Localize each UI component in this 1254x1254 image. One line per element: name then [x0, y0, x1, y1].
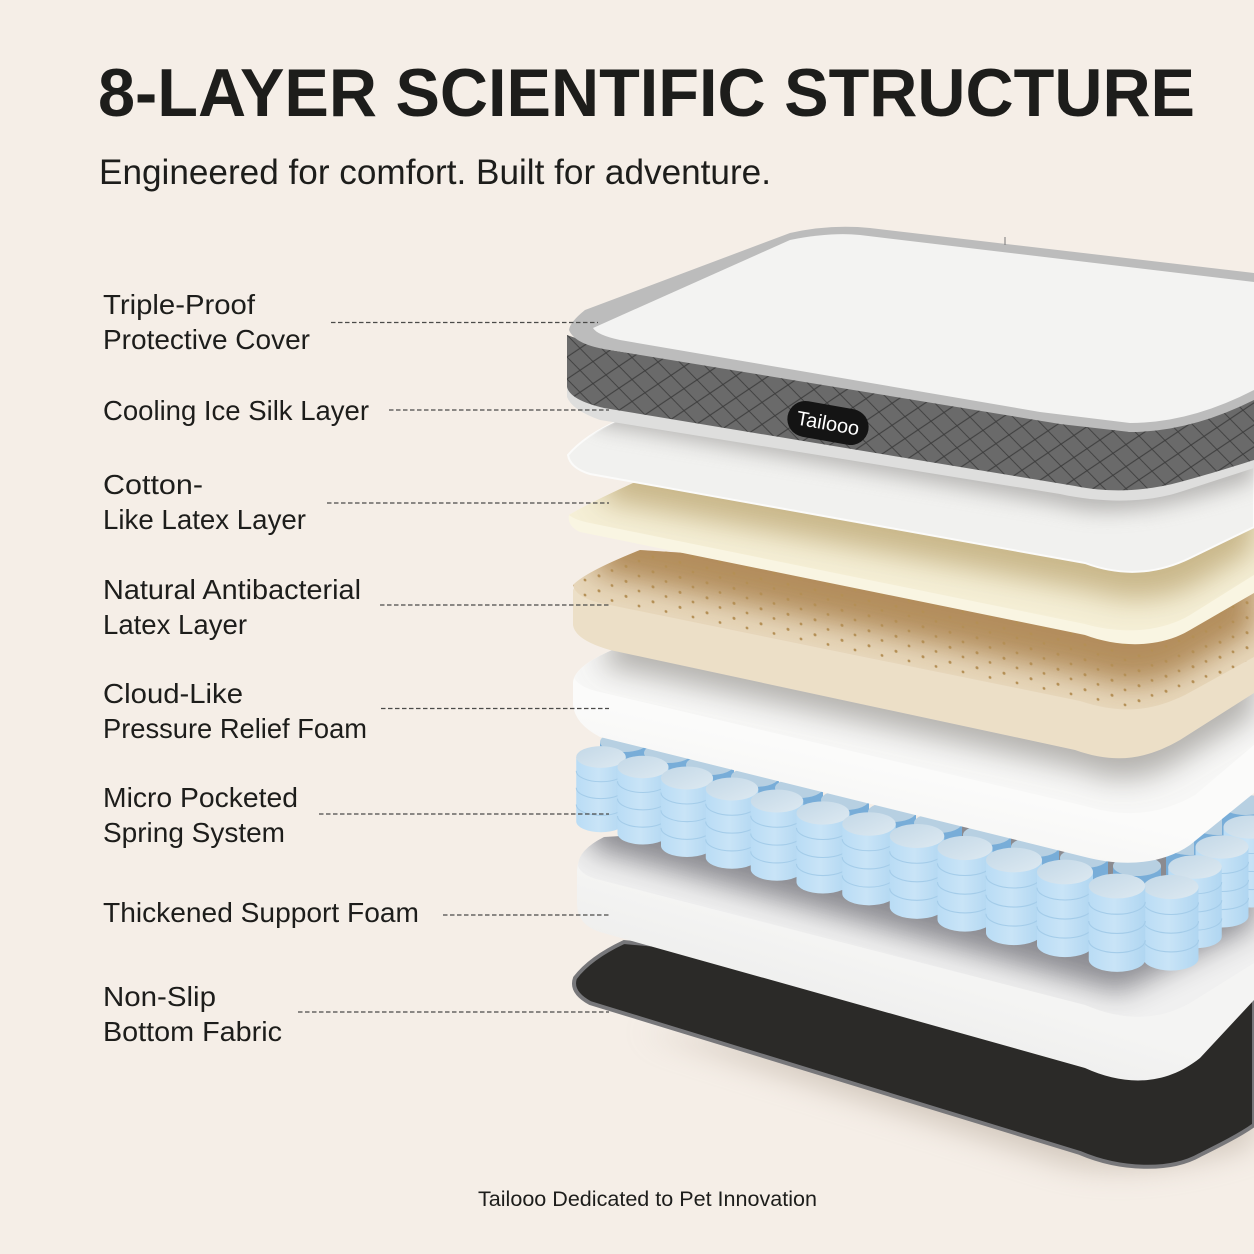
- label: cooling ice silk layer: Cooling Ice Silk Layer: [103, 395, 369, 426]
- layer: triple-proof protective cover: [567, 227, 1254, 501]
- badge: Tailooo: [795, 408, 861, 440]
- white top surface: [593, 234, 1254, 423]
- label: triple-proof protective cover: Protective Cover: [103, 324, 310, 355]
- label: non-slip bottom fabric: Bottom Fabric: [103, 1016, 282, 1047]
- piping rim: [569, 227, 1254, 432]
- label: cotton-like latex layer: Cotton-: [103, 469, 203, 500]
- perforation dots: [573, 550, 1254, 709]
- callout lines: [298, 322, 609, 1012]
- label: natural antibacterial latex layer: [103, 574, 361, 640]
- label: micro pocketed spring system: Spring System: [103, 817, 285, 848]
- label: cloud-like pressure relief foam: Cloud-Like: [103, 678, 243, 709]
- label: micro pocketed spring system: Micro Pocketed: [103, 782, 298, 813]
- layer: cotton-like latex: [569, 483, 1254, 644]
- layer: micro pocketed spring system: [576, 732, 1254, 972]
- label: non-slip bottom fabric: [103, 981, 282, 1047]
- label: natural antibacterial latex layer: Natural Antibacterial: [103, 574, 361, 605]
- quilted side band: [567, 335, 1254, 490]
- label: triple-proof protective cover: Triple-Proof: [103, 289, 255, 320]
- zipper seam: [1004, 237, 1006, 245]
- layer: natural antibacterial latex: [573, 550, 1254, 758]
- footer tagline: Tailooo Dedicated to Pet Innovation: [478, 1188, 817, 1211]
- title: 8-LAYER SCIENTIFIC STRUCTURE: [98, 55, 1195, 131]
- lower piping: [567, 380, 1254, 501]
- badge: [784, 398, 872, 448]
- label: cotton-like latex layer: Like Latex Layer: [103, 504, 306, 535]
- label: micro pocketed spring system: [103, 782, 298, 848]
- label: cotton-like latex layer: [103, 469, 306, 535]
- label: non-slip bottom fabric: Non-Slip: [103, 981, 216, 1012]
- label: cloud-like pressure relief foam: Pressure Relief Foam: [103, 713, 367, 744]
- layer: cooling ice silk: [567, 422, 1254, 573]
- layer: thickened support foam: [577, 826, 1254, 1080]
- label: cloud-like pressure relief foam: [103, 678, 367, 744]
- subtitle: Engineered for comfort. Built for adventure.: [99, 153, 771, 192]
- label: thickened support foam: Thickened Support Foam: [103, 897, 419, 928]
- label: triple-proof protective cover: [103, 289, 310, 355]
- layer: cloud-like pressure relief foam: [573, 650, 1254, 863]
- layer: non-slip bottom fabric: [574, 942, 1254, 1170]
- label: natural antibacterial latex layer: Latex Layer: [103, 609, 247, 640]
